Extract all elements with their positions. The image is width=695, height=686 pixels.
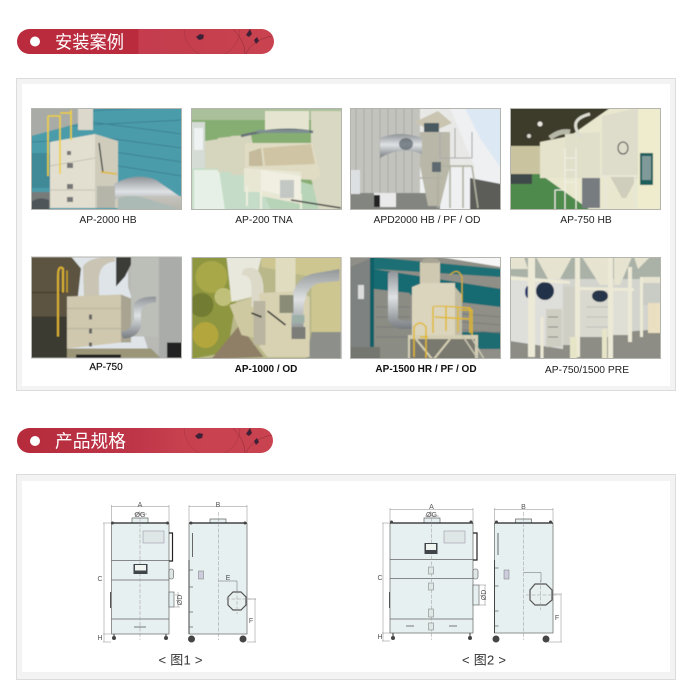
dimension lines: ØD bbox=[177, 595, 184, 605]
caption: figure 1: < 图1 > bbox=[158, 652, 202, 668]
caption: figure 2: < 图2 > bbox=[462, 652, 506, 668]
dimension lines: A bbox=[429, 504, 434, 511]
diagram: figure 1 bbox=[97, 502, 256, 668]
drawing: figure 1 views bbox=[97, 502, 256, 642]
photo: AP-1500 HR / PF / OD bbox=[350, 257, 501, 359]
dimension lines: E bbox=[226, 575, 231, 582]
side view bbox=[188, 512, 256, 642]
caption: APD2000 HB / PF / OD: APD2000 HB / PF / OD bbox=[373, 215, 481, 226]
dimension lines: C bbox=[97, 576, 103, 583]
front view bbox=[110, 512, 174, 640]
dimension lines: H bbox=[97, 635, 103, 642]
panel: product specifications bbox=[16, 474, 676, 680]
drawing: figure 2 views bbox=[377, 504, 562, 642]
banner title: 产品规格 bbox=[55, 432, 126, 452]
photo: AP-750/1500 PRE bbox=[510, 257, 661, 359]
caption: AP-1000 / OD: AP-1000 / OD bbox=[235, 364, 297, 375]
photo: AP-750 bbox=[31, 256, 182, 358]
caption: AP-200 TNA: AP-200 TNA bbox=[235, 215, 293, 226]
banner title: 安装案例 bbox=[55, 32, 124, 52]
bullet dot bbox=[30, 36, 40, 46]
photo: AP-750 HB bbox=[510, 108, 661, 210]
bullet dot bbox=[30, 436, 40, 446]
caption: AP-750: AP-750 bbox=[89, 362, 123, 373]
photo: AP-200 TNA bbox=[191, 108, 342, 210]
dimension lines: H bbox=[377, 634, 383, 641]
dimension lines bbox=[97, 502, 256, 642]
banner floral decoration bbox=[184, 29, 272, 54]
front view bbox=[390, 512, 479, 640]
dimension lines: ØG bbox=[426, 512, 437, 519]
side view bbox=[492, 512, 560, 642]
caption: AP-1500 HR / PF / OD: AP-1500 HR / PF / OD bbox=[375, 364, 477, 375]
dimension lines: ØD bbox=[481, 590, 488, 600]
panel: installation cases bbox=[16, 78, 676, 390]
dimension lines: F bbox=[249, 618, 253, 625]
dimension lines: ØG bbox=[135, 512, 145, 519]
dimension lines: B bbox=[521, 504, 526, 511]
banner: product specifications bbox=[17, 428, 273, 453]
dimension lines: B bbox=[216, 502, 221, 509]
dimension lines: F bbox=[555, 615, 559, 622]
caption: AP-750 HB: AP-750 HB bbox=[560, 215, 612, 226]
dimension lines: C bbox=[377, 575, 383, 582]
banner: installation cases bbox=[17, 29, 274, 54]
caption: AP-750/1500 PRE: AP-750/1500 PRE bbox=[545, 365, 629, 376]
diagram: figure 2 bbox=[377, 504, 562, 668]
caption: AP-2000 HB: AP-2000 HB bbox=[79, 215, 137, 226]
banner floral decoration bbox=[184, 428, 272, 453]
dimension lines: A bbox=[138, 502, 143, 509]
photo: APD2000 HB / PF / OD bbox=[350, 108, 501, 210]
photo: AP-1000 / OD bbox=[190, 257, 342, 359]
dimension lines bbox=[377, 504, 562, 642]
photo: AP-2000 HB bbox=[31, 106, 182, 210]
